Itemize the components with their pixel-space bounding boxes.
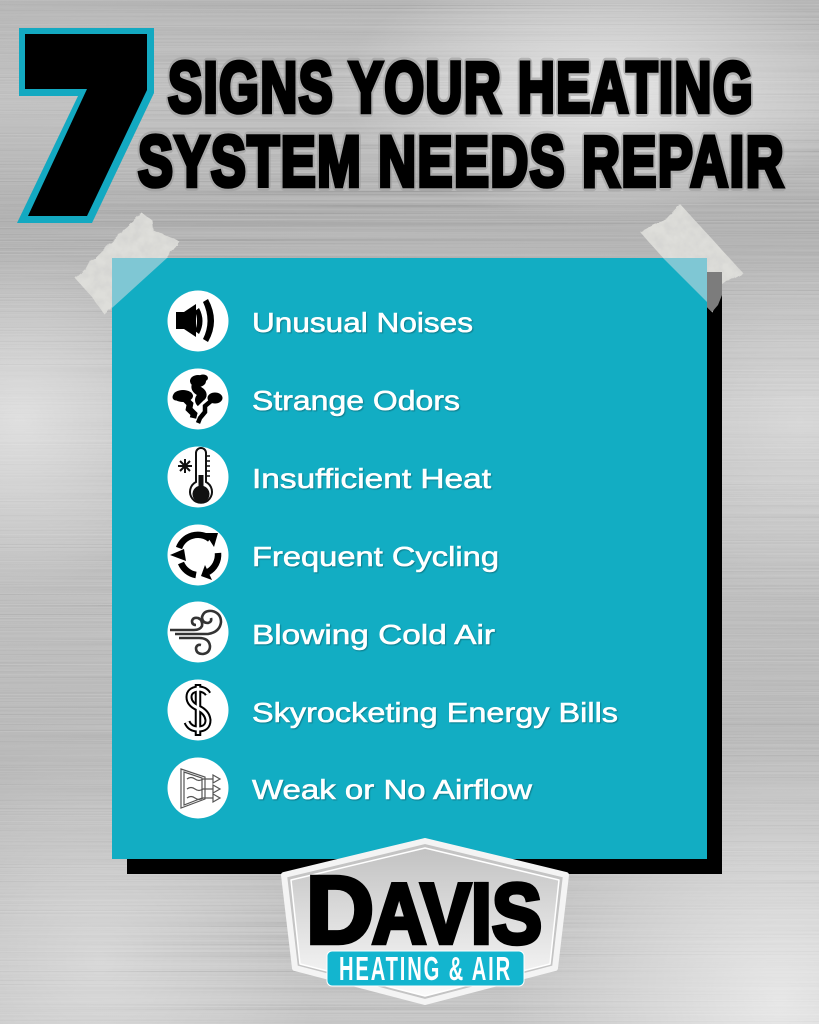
- tape: right, behind panel: [640, 204, 743, 312]
- logo tagline: HEATING & AIR: [339, 950, 512, 987]
- label: Strange Odors: [252, 385, 460, 416]
- icon: speaker: [168, 290, 228, 352]
- list row 4: Frequent Cycling: [168, 524, 499, 586]
- icon: wind: [168, 602, 228, 662]
- list row 2: Strange Odors: [168, 368, 460, 430]
- list row 6: Skyrocketing Energy Bills: [168, 680, 618, 740]
- list row 1: Unusual Noises: [168, 290, 473, 352]
- label: Blowing Cold Air: [252, 619, 495, 650]
- icon: thermometer: [168, 446, 228, 508]
- numeral 7: [17, 28, 154, 223]
- label: Unusual Noises: [252, 307, 473, 338]
- logo shield: [284, 841, 566, 1002]
- list row 5: Blowing Cold Air: [168, 602, 495, 662]
- label: Insufficient Heat: [252, 463, 491, 494]
- list row 7: Weak or No Airflow: [168, 758, 533, 818]
- icon: dollar sign: [168, 680, 228, 740]
- logo pill: [327, 951, 524, 986]
- logo wordmark: D: [306, 857, 374, 964]
- logo: Davis Heating & Air: [284, 841, 566, 1002]
- label: Weak or No Airflow: [252, 774, 533, 805]
- icon: odor clouds: [168, 368, 228, 430]
- label: Skyrocketing Energy Bills: [252, 697, 618, 728]
- tape: over shadow: [707, 272, 722, 312]
- icon: airflow vent: [168, 758, 228, 818]
- tape: left, behind panel: [75, 213, 180, 315]
- tape: right, over panel: [663, 258, 707, 302]
- icon: cycle arrows: [168, 524, 228, 586]
- logo wordmark: [306, 857, 542, 964]
- title: [138, 49, 785, 202]
- panel shadow: [127, 273, 722, 874]
- logo wordmark: AVIS: [372, 867, 542, 962]
- label: Frequent Cycling: [252, 541, 499, 572]
- panel: [112, 258, 707, 859]
- list row 3: Insufficient Heat: [168, 446, 491, 508]
- tape: left, over panel: [112, 258, 167, 308]
